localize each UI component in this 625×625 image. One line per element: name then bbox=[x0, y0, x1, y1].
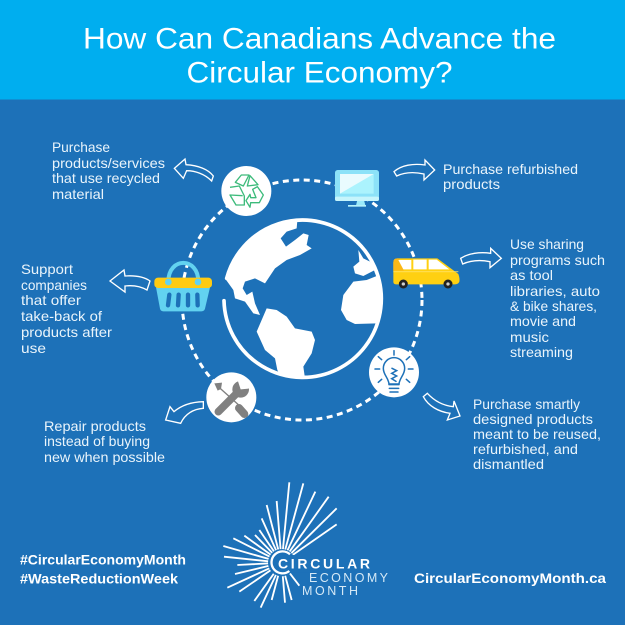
text: recycled material bbox=[52, 139, 165, 202]
logo wordmark: MONTH bbox=[302, 584, 358, 598]
text: recycled material: products/services bbox=[52, 155, 165, 171]
logo wordmark bbox=[278, 556, 389, 598]
hashtags: #CircularEconomyMonth bbox=[20, 552, 186, 568]
text: sharing programs: movie and bbox=[510, 313, 576, 329]
hashtags: #WasteReductionWeek bbox=[20, 570, 178, 586]
text: repair: instead of buying bbox=[44, 433, 150, 449]
text: smart design: dismantled bbox=[473, 456, 544, 472]
text: recycled material: that use recycled bbox=[52, 170, 160, 186]
website: CircularEconomyMonth.ca bbox=[414, 570, 606, 586]
globe bbox=[224, 220, 381, 378]
icon: computer monitor bbox=[335, 170, 379, 207]
text: smart design bbox=[473, 396, 601, 472]
text: recycled material: material bbox=[52, 186, 104, 202]
icon: recycling symbol bbox=[221, 166, 271, 216]
icon: light bulb bbox=[369, 347, 419, 397]
text: take-back: products after bbox=[21, 324, 112, 340]
text: sharing programs bbox=[510, 236, 605, 360]
text: sharing programs: libraries, auto bbox=[510, 283, 600, 299]
text: sharing programs: programs such bbox=[510, 252, 605, 268]
logo sunburst rays bbox=[223, 482, 338, 608]
arrow: to smart design text bbox=[423, 393, 460, 420]
logo wordmark: CIRCULAR bbox=[278, 556, 370, 572]
text: smart design: designed products bbox=[473, 411, 593, 427]
title: Circular Economy? bbox=[186, 56, 452, 90]
text: take-back bbox=[21, 261, 112, 356]
dashed ring bbox=[182, 180, 422, 420]
text: sharing programs: as tool bbox=[510, 267, 553, 283]
icon: wrench and screwdriver bbox=[206, 372, 256, 422]
text: smart design: meant to be reused, bbox=[473, 426, 601, 442]
text: smart design: refurbished, and bbox=[473, 441, 578, 457]
text: take-back: companies bbox=[21, 277, 87, 293]
icon: yellow van bbox=[393, 258, 460, 288]
arrow: to refurbished text bbox=[394, 160, 435, 180]
text: recycled material: Purchase bbox=[52, 139, 110, 155]
text: take-back: that offer bbox=[21, 292, 81, 308]
text: refurbished: products bbox=[443, 176, 500, 192]
text: refurbished bbox=[443, 161, 578, 192]
text: repair bbox=[44, 418, 165, 465]
icon: shopping basket bbox=[154, 263, 212, 311]
logo wordmark: ECONOMY bbox=[309, 571, 389, 585]
text: repair: Repair products bbox=[44, 418, 146, 434]
arrow: to sharing programs text bbox=[461, 248, 501, 268]
arrow: to repair text bbox=[166, 402, 203, 423]
text: sharing programs: Use sharing bbox=[510, 236, 584, 252]
arrow: to recycled material text bbox=[174, 159, 213, 181]
title: How Can Canadians Advance the bbox=[83, 22, 556, 56]
logo: circular economy month bbox=[223, 482, 389, 608]
text: take-back: Support bbox=[21, 261, 73, 277]
title bbox=[83, 22, 556, 90]
text: take-back: use bbox=[21, 340, 46, 356]
header band bbox=[0, 0, 625, 100]
text: repair: new when possible bbox=[44, 449, 165, 465]
text: sharing programs: music bbox=[510, 329, 549, 345]
text: take-back: take-back of bbox=[21, 308, 102, 324]
text: smart design: Purchase smartly bbox=[473, 396, 580, 412]
text: sharing programs: streaming bbox=[510, 344, 573, 360]
arrow: to take-back text bbox=[110, 270, 150, 292]
text: refurbished: Purchase refurbished bbox=[443, 161, 578, 177]
text: sharing programs: & bike shares, bbox=[510, 298, 597, 314]
hashtags bbox=[20, 552, 186, 586]
